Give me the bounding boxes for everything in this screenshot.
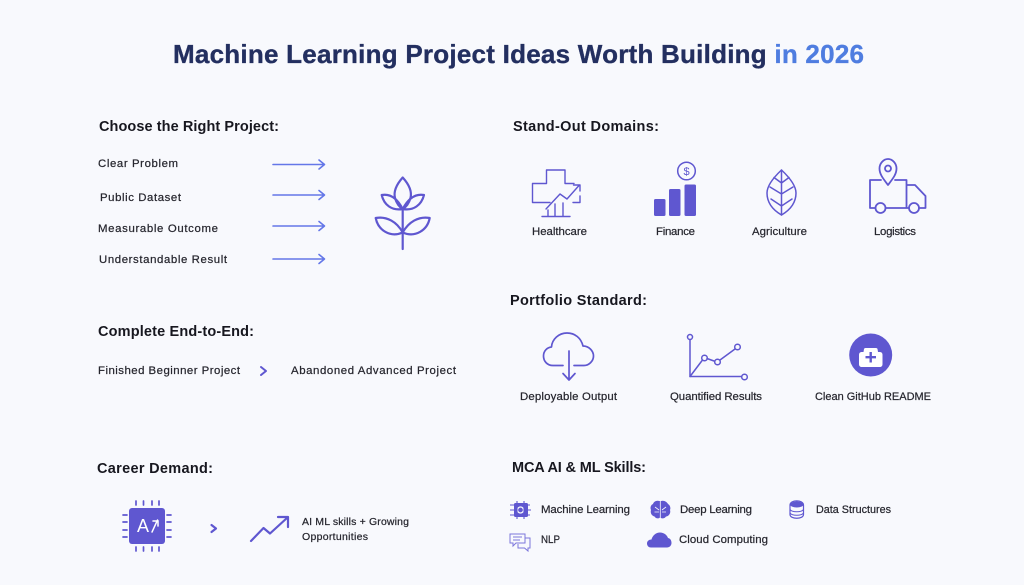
label: skills and opportunities: Opportunities [302, 531, 368, 543]
icon: chevron [212, 525, 216, 532]
heading: choose the right project: Choose the Right Project: [99, 119, 279, 135]
label: measurable outcome: Measurable Outcome [98, 223, 218, 235]
label: finished beginner project: Finished Beginner Project [98, 365, 241, 377]
heading: complete end-to-end: Complete End-to-End: [98, 324, 254, 340]
label: skills and opportunities: AI ML skills + Growing [302, 516, 409, 528]
icon: finance [654, 162, 696, 216]
label: understandable result: Understandable Result [99, 254, 228, 266]
label: public dataset: Public Dataset [100, 192, 182, 204]
icon: logistics [870, 159, 926, 213]
title: Machine Learning Project Ideas Worth Building in 2026 [173, 39, 864, 69]
label: cloud computing: Cloud Computing [679, 534, 768, 546]
label: data structures: Data Structures [816, 504, 891, 516]
icon: AI chip [123, 501, 171, 551]
icon: finance: $ [683, 166, 690, 178]
label: nlp: NLP [541, 534, 560, 546]
icon: healthcare [532, 170, 580, 216]
label: finance: Finance [656, 226, 695, 238]
label: clear problem: Clear Problem [98, 158, 178, 170]
icon: line chart [688, 334, 747, 380]
panel: MCA AI and ML skills [510, 460, 891, 551]
icon: agriculture [767, 170, 796, 215]
label: abandoned advanced project: Abandoned Advanced Project [291, 365, 457, 377]
icon: cloud [647, 532, 672, 548]
icon: AI chip: A [137, 516, 149, 536]
label: machine learning: Machine Learning [541, 504, 630, 516]
heading: portfolio standard: Portfolio Standard: [510, 293, 647, 309]
icon: plant [376, 178, 430, 249]
heading: MCA AI and ML skills: MCA AI & ML Skills: [512, 460, 646, 476]
label: deep learning: Deep Learning [680, 504, 752, 516]
icon: database [790, 501, 804, 518]
icon: cloud download [544, 333, 594, 380]
panel: complete end-to-end [98, 324, 457, 377]
panel: stand-out domains [513, 119, 926, 238]
icon: chevron [261, 367, 266, 375]
panel: career demand [97, 461, 409, 551]
icon: trend arrow [251, 517, 288, 541]
label: deployable output: Deployable Output [520, 391, 618, 403]
heading: stand-out domains: Stand-Out Domains: [513, 119, 659, 135]
arrows [273, 160, 324, 264]
icon: github badge [849, 334, 892, 376]
label: quantified results: Quantified Results [670, 391, 762, 403]
panel: portfolio standard [510, 293, 931, 403]
label: healthcare: Healthcare [532, 226, 587, 238]
label: logistics: Logistics [874, 226, 916, 238]
icon: processor [510, 501, 531, 519]
label: agriculture: Agriculture [752, 226, 807, 238]
icon: brain [651, 501, 670, 518]
label: clean github readme: Clean GitHub README [815, 391, 931, 403]
panel: choose the right project [98, 119, 430, 266]
icon: chat bubbles [510, 534, 530, 551]
heading: career demand: Career Demand: [97, 461, 213, 477]
